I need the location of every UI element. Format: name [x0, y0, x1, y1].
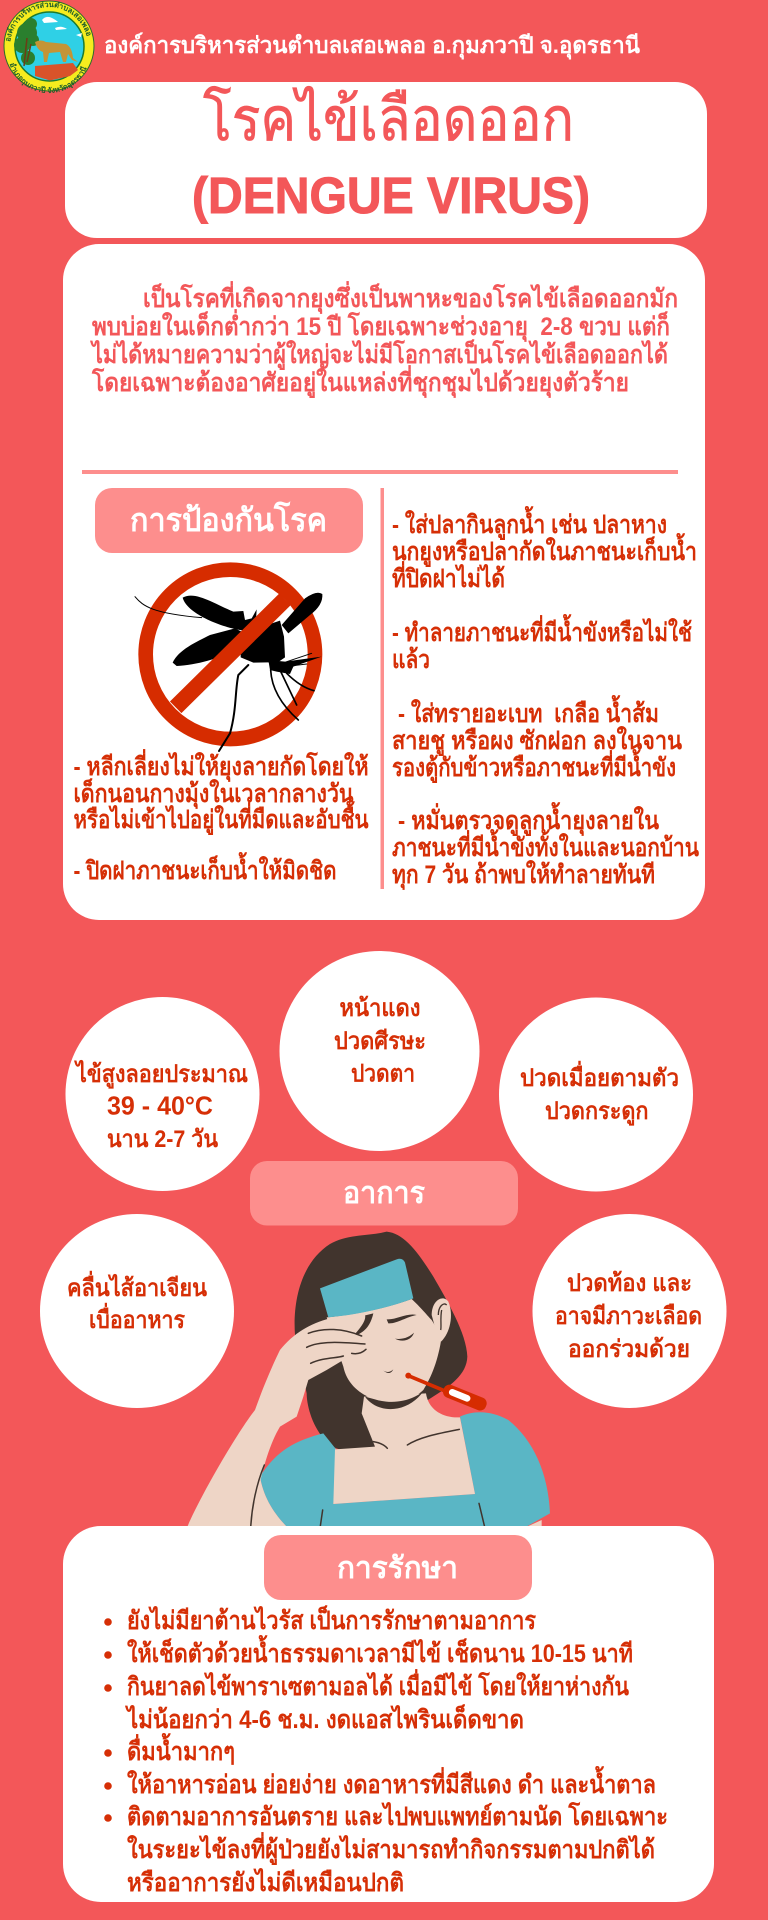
text block: prevention right: ภาชนะที่มีน้ำขังทั้งในและนอกบ้าน — [392, 828, 699, 862]
symptom bubble: nausea: เบื่ออาหาร — [89, 1302, 185, 1334]
list: treatment items: ติดตามอาการอันตราย และไปพบแพทย์ตามนัด โดยเฉพาะ — [127, 1801, 668, 1831]
thermometer — [405, 1373, 489, 1412]
list: treatment items: หรืออาการยังไม่ดีเหมือนปกติ — [127, 1867, 404, 1897]
title: Thai: โรคไข้เลือดออก — [203, 85, 574, 153]
text block: introduction — [89, 281, 678, 399]
text block: prevention right: ที่ปิดฝาไม่ได้ — [392, 561, 505, 593]
hair — [295, 1232, 467, 1451]
text block: prevention right: สายชู หรือผง ซักฝอก ลงในจาน — [392, 725, 682, 757]
list: treatment items: ไม่น้อยกว่า 4-6 ช.ม. งดแอสไพรินเด็ดขาด — [124, 1704, 524, 1734]
chin shadow — [365, 1391, 424, 1409]
text block: prevention left: หรือไม่เข้าไปอยู่ในที่มืดและอับชื้น — [74, 800, 368, 836]
ear — [432, 1298, 451, 1342]
text block: prevention right — [392, 505, 699, 891]
list: treatment items: ดื่มน้ำมากๆ — [127, 1732, 235, 1766]
arm and hand — [187, 1315, 366, 1528]
icon: organisation seal — [4, 0, 94, 94]
eyebrow, eye, nose — [383, 1315, 417, 1373]
list: treatment items: ยังไม่มียาต้านไวรัส เป็นการรักษาตามอาการ — [127, 1605, 536, 1635]
title: English: (DENGUE VIRUS) — [192, 167, 590, 224]
symptom bubble: body ache — [499, 998, 693, 1192]
icon: organisation seal: องค์การบริหารส่วนตำบลเสอเพลอ — [6, 2, 91, 42]
symptom bubble: flushed face: หน้าแดง — [340, 995, 420, 1022]
symptom bubble: fever — [66, 997, 260, 1191]
symptom bubble: flushed face: ปวดศีรษะ — [334, 1028, 426, 1055]
heading: treatment: การรักษา — [337, 1552, 458, 1585]
symptom bubble: abdominal pain: อาจมีภาวะเลือด — [555, 1303, 702, 1330]
text block: prevention right: - ใส่ทรายอะเบท เกลือ น้ำส้ม — [398, 694, 659, 728]
symptom bubble: abdominal pain: ปวดท้อง และ — [567, 1270, 692, 1297]
finger and body lines — [251, 1329, 485, 1528]
list: treatment items: ในระยะไข้ลงที่ผู้ป่วยยังไม่สามารถทำกิจกรรมตามปกติได้ — [127, 1832, 655, 1866]
heading: prevention — [95, 488, 363, 553]
symptom bubble: fever: 39 - 40°C — [107, 1090, 213, 1120]
text block: prevention right: - หมั่นตรวจดูลูกน้ำยุงลายใน — [398, 801, 659, 837]
list: treatment items: กินยาลดไข้พาราเซตามอลได้ เมื่อมีไข้ โดยให้ยาห่างกัน — [127, 1669, 629, 1701]
symptom bubble: nausea — [40, 1214, 234, 1408]
heading: symptoms — [250, 1161, 518, 1226]
heading: treatment — [264, 1535, 532, 1600]
panel: title — [65, 82, 707, 238]
illustration: sick woman with thermometer — [187, 1232, 550, 1528]
hand shadow — [347, 1313, 373, 1335]
heading: prevention: การป้องกันโรค — [130, 501, 327, 538]
symptom bubble: fever: ไข้สูงลอยประมาณ — [73, 1059, 248, 1089]
shirt — [260, 1412, 550, 1528]
symptom bubble: fever: นาน 2-7 วัน — [107, 1126, 219, 1153]
face — [327, 1299, 442, 1402]
cooling patch — [320, 1259, 413, 1317]
symptom bubble: flushed face — [280, 951, 480, 1151]
text block: prevention left: เด็กนอนกางมุ้งในเวลากลางวัน — [74, 778, 354, 810]
text block: prevention right: นกยูงหรือปลากัดในภาชนะเก็บน้ำ — [392, 532, 697, 568]
text block: introduction: พบบ่อยในเด็กต่ำกว่า 15 ปี โดยเฉพาะช่วงอายุ 2-8 ขวบ แต่ก็ — [92, 309, 670, 343]
text block: introduction: ไม่ได้หมายความว่าผู้ใหญ่จะไม่มีโอกาสเป็นโรคไข้เลือดออกได้ — [89, 339, 668, 371]
symptom bubble: body ache: ปวดกระดูก — [545, 1098, 648, 1126]
symptom bubble: body ache: ปวดเมื่อยตามตัว — [520, 1060, 679, 1092]
panel: treatment — [63, 1526, 714, 1902]
list: treatment items: ให้อาหารอ่อน ย่อยง่าย งดอาหารที่มีสีแดง ดำ และน้ำตาล — [127, 1765, 656, 1799]
text block: prevention left: - ปิดฝาภาชนะเก็บน้ำให้มิดชิด — [74, 851, 336, 885]
neck and chest — [333, 1393, 475, 1504]
symptom bubble: abdominal pain: ออกร่วมด้วย — [568, 1336, 690, 1363]
panel: introduction and prevention — [63, 244, 705, 920]
text block: introduction: โดยเฉพาะต้องอาศัยอยู่ในแหล่งที่ชุกชุมไปด้วยยุงตัวร้าย — [91, 365, 629, 399]
header: organisation name: องค์การบริหารส่วนตำบลเสอเพลอ อ.กุมภวาปี จ.อุดรธานี — [104, 32, 640, 60]
text block: prevention right: แล้ว — [392, 646, 430, 674]
icon: organisation seal: อำเภอกุมภวาปี จังหวัดอุดรธานี — [10, 62, 87, 94]
text block: prevention left: - หลีกเลี่ยงไม่ให้ยุงลายกัดโดยให้ — [74, 749, 368, 783]
text block: prevention right: รองตู้กับข้าวหรือภาชนะที่มีน้ำขัง — [392, 748, 676, 784]
left shoulder skin — [251, 1477, 542, 1528]
heading: symptoms: อาการ — [343, 1177, 425, 1210]
text block: prevention right: - ทำลายภาชนะที่มีน้ำขังหรือไม่ใช้ — [392, 613, 692, 647]
symptom bubble: nausea: คลื่นไส้อาเจียน — [67, 1270, 208, 1302]
text block: prevention left — [74, 749, 368, 885]
symptom bubble: abdominal pain — [532, 1214, 726, 1408]
text block: prevention right: ทุก 7 วัน ถ้าพบให้ทำลายทันที — [392, 859, 655, 891]
text block: prevention right: - ใส่ปลากินลูกน้ำ เช่น ปลาหาง — [392, 505, 667, 541]
icon: no mosquito sign — [135, 570, 322, 751]
list: treatment items — [104, 1605, 668, 1897]
text block: introduction: เป็นโรคที่เกิดจากยุงซึ่งเป็นพาหะของโรคไข้เลือดออกมัก — [143, 281, 678, 315]
symptom bubble: flushed face: ปวดตา — [351, 1060, 415, 1088]
list: treatment items: ให้เช็ดตัวด้วยน้ำธรรมดาเวลามีไข้ เช็ดนาน 10-15 นาที — [127, 1634, 633, 1668]
